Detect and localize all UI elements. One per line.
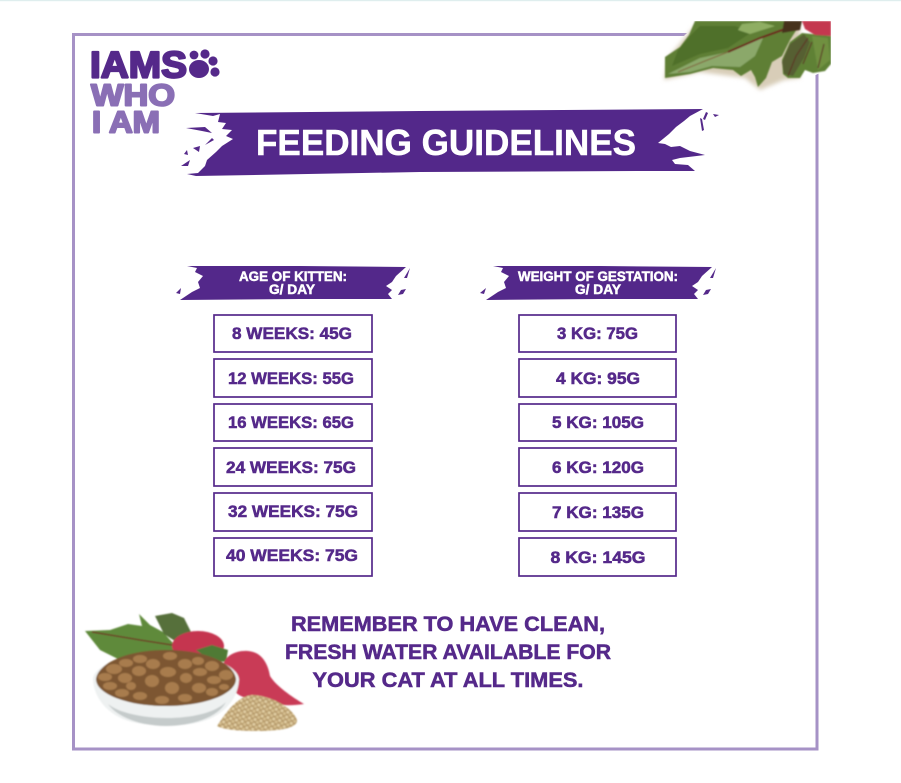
logo wordmark I AM: I AM bbox=[92, 104, 160, 140]
row: 12 weeks: 12 WEEKS: 55G bbox=[228, 369, 354, 388]
kibble base bbox=[96, 650, 236, 706]
top-right leaf illustration bbox=[660, 21, 831, 92]
reminder line 1: REMEMBER TO HAVE CLEAN, bbox=[291, 612, 605, 636]
outer frame bbox=[74, 34, 817, 749]
logo wordmark WHO: WHO bbox=[91, 78, 175, 112]
reminder message bbox=[285, 612, 611, 692]
row: 40 weeks: 40 WEEKS: 75G bbox=[226, 546, 358, 565]
row: 12 weeks bbox=[214, 359, 372, 397]
heading: feeding guidelines: FEEDING GUIDELINES bbox=[256, 122, 636, 163]
column header banner: age of kitten bbox=[176, 266, 410, 300]
column: weight of gestation bbox=[480, 266, 716, 576]
row: 6 kg bbox=[519, 448, 676, 486]
row: 8 weeks bbox=[214, 315, 372, 352]
row: 7 kg bbox=[519, 493, 676, 531]
column header banner: weight of gestation bbox=[480, 266, 716, 300]
row: 16 weeks bbox=[214, 404, 372, 441]
row: 5 kg: 5 KG: 105G bbox=[552, 413, 644, 432]
icon: paw print bbox=[189, 49, 220, 78]
column header banner: age of kitten: G/ DAY bbox=[269, 282, 315, 297]
row: 32 weeks: 32 WEEKS: 75G bbox=[228, 502, 358, 521]
leaf stems bbox=[727, 28, 784, 54]
banner: feeding guidelines bbox=[181, 109, 719, 176]
row: 6 kg: 6 KG: 120G bbox=[552, 458, 644, 477]
row: 16 weeks: 16 WEEKS: 65G bbox=[228, 413, 354, 432]
row: 8 kg bbox=[519, 538, 676, 576]
back beet bbox=[172, 631, 224, 661]
row: 40 weeks bbox=[214, 538, 372, 576]
row: 32 weeks bbox=[214, 493, 372, 531]
row: 3 kg: 3 KG: 75G bbox=[557, 324, 638, 343]
leaf backing that hides the frame corner bbox=[684, 33, 818, 75]
kibble pieces bbox=[98, 652, 233, 704]
row: 8 kg: 8 KG: 145G bbox=[550, 548, 646, 567]
back leaf bbox=[782, 33, 831, 78]
row: 3 kg bbox=[519, 315, 676, 352]
stem knot bbox=[782, 21, 802, 33]
row: 7 kg: 7 KG: 135G bbox=[552, 503, 644, 522]
food illustration: bowl, beets and grains bbox=[85, 613, 304, 731]
row: 24 weeks bbox=[214, 448, 372, 486]
row: 4 kg bbox=[519, 359, 676, 397]
row: 5 kg bbox=[519, 404, 676, 441]
leaf shadow bbox=[664, 24, 800, 90]
main leaf bbox=[665, 21, 802, 87]
beet top bbox=[802, 21, 831, 36]
column header banner: weight of gestation: WEIGHT OF GESTATION: bbox=[518, 269, 678, 284]
front beet bbox=[223, 651, 304, 705]
banner left tear marks bbox=[181, 127, 214, 166]
white bowl bbox=[93, 652, 239, 726]
row: 8 weeks: 8 WEEKS: 45G bbox=[232, 324, 352, 343]
banner right tear marks bbox=[700, 112, 719, 131]
column: age of kitten bbox=[176, 266, 410, 576]
left beet leaf bbox=[85, 614, 178, 660]
banner ribbon bbox=[187, 109, 705, 176]
upper beet leaf bbox=[155, 613, 191, 643]
row: 4 kg: 4 KG: 95G bbox=[556, 369, 640, 388]
column header banner: weight of gestation: G/ DAY bbox=[575, 282, 621, 297]
reminder line 3: YOUR CAT AT ALL TIMES. bbox=[312, 668, 584, 692]
small leaf behind bowl bbox=[196, 645, 228, 662]
row: 24 weeks: 24 WEEKS: 75G bbox=[226, 458, 356, 477]
column header banner: age of kitten: AGE OF KITTEN: bbox=[239, 269, 347, 284]
reminder line 2: FRESH WATER AVAILABLE FOR bbox=[285, 640, 611, 664]
grain pile bbox=[217, 695, 297, 731]
logo wordmark IAMS: IAMS bbox=[90, 44, 187, 86]
logo: IAMS Who I Am bbox=[90, 44, 220, 140]
